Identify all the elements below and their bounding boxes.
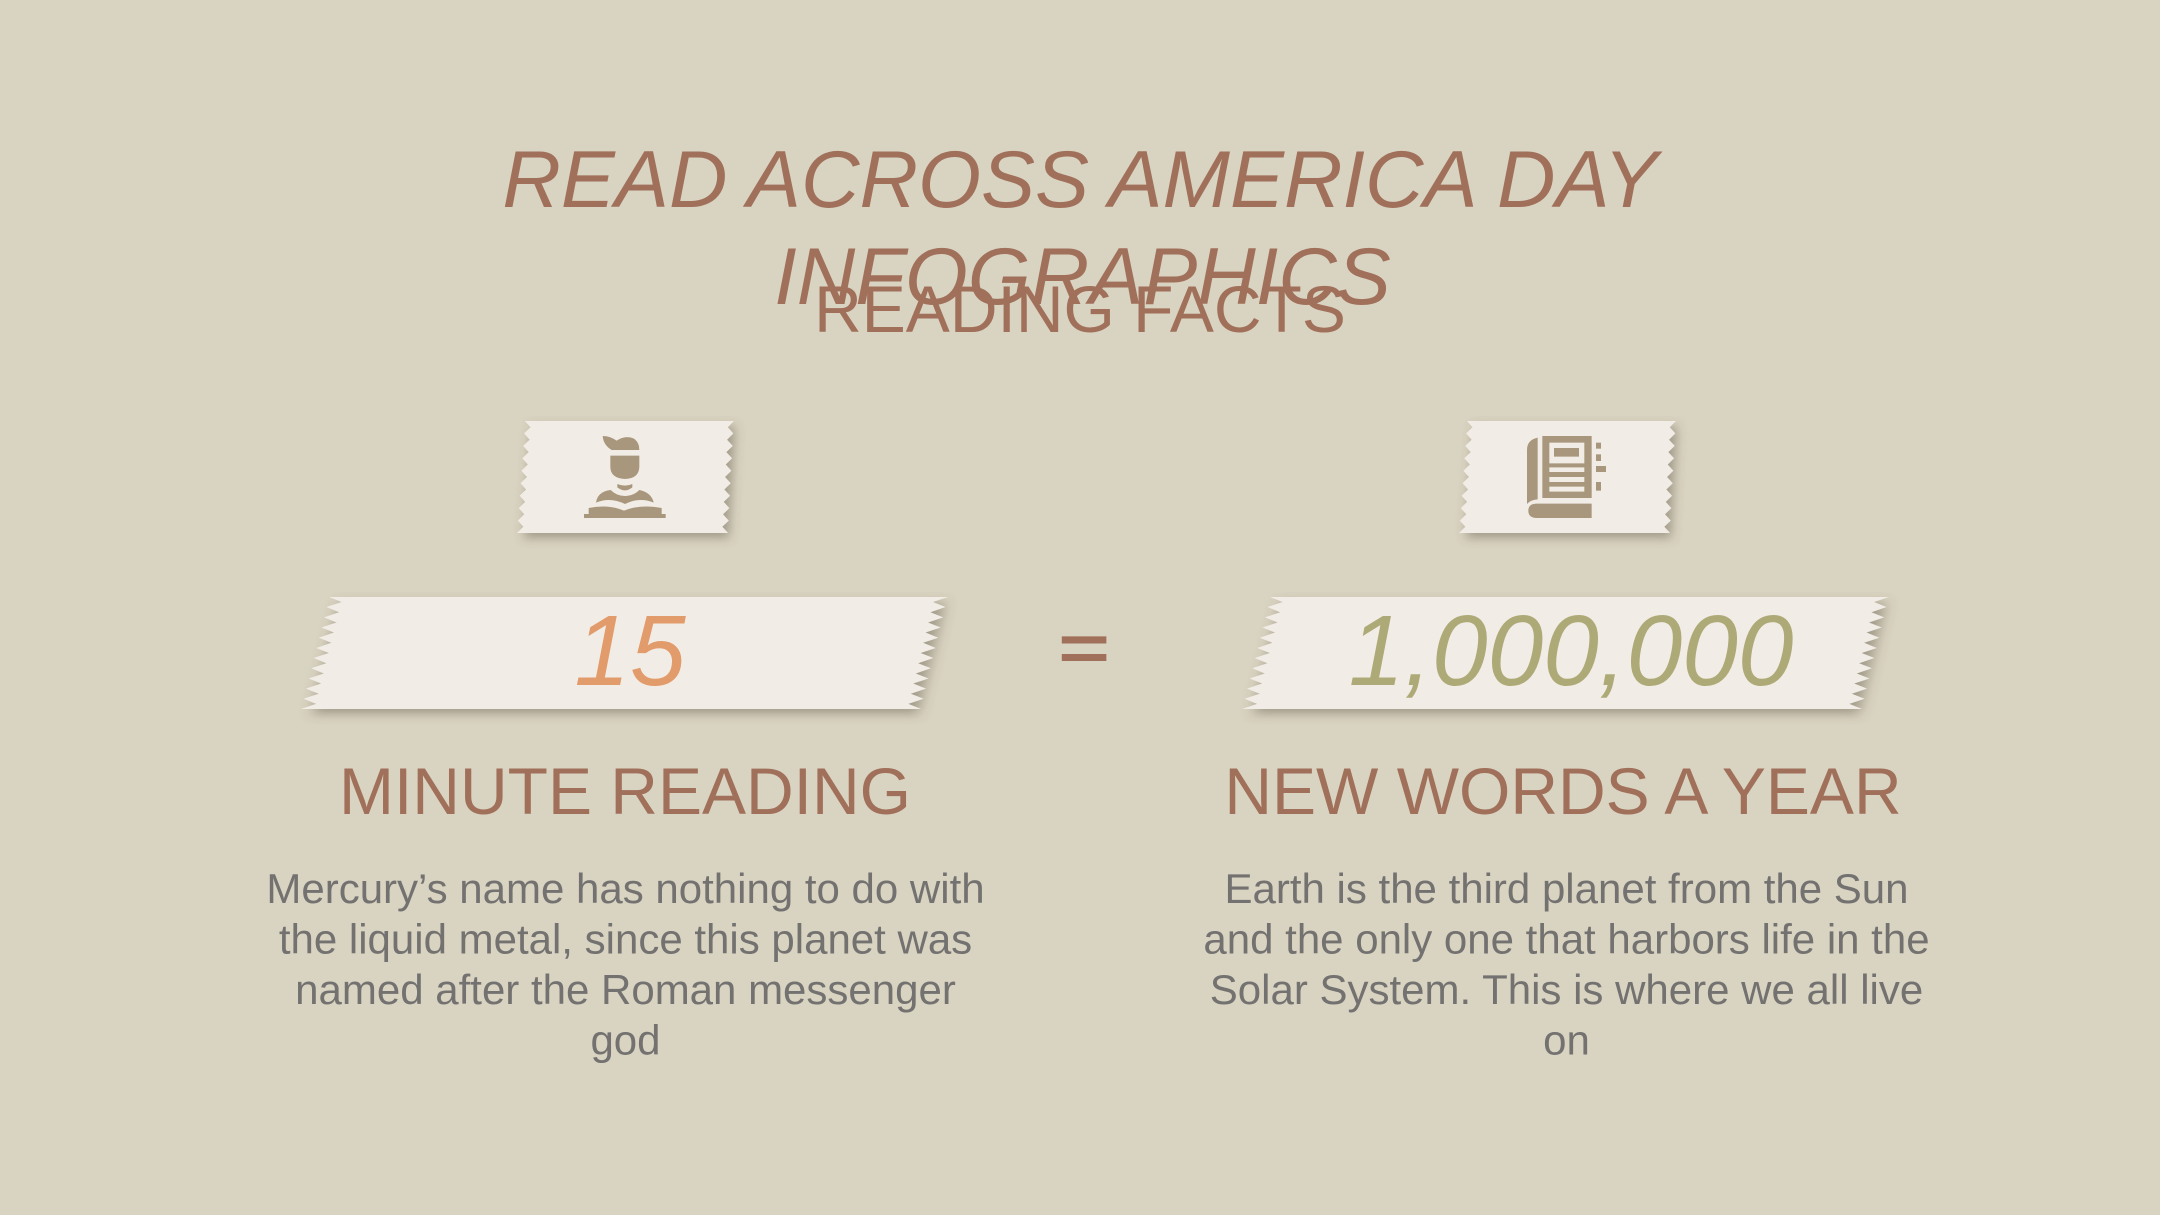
icon: book with text xyxy=(1527,436,1606,518)
description: Solar System. This is where we all live xyxy=(1210,966,1923,1013)
heading: MINUTE READING xyxy=(339,754,911,828)
subtitle: READING FACTS xyxy=(814,272,1346,346)
description: named after the Roman messenger xyxy=(295,966,956,1013)
description: Earth is the third planet from the Sun xyxy=(1224,865,1909,912)
number: 1,000,000 xyxy=(1349,595,1793,707)
panel: right column xyxy=(1203,421,1930,1064)
description: the liquid metal, since this planet was xyxy=(279,916,972,962)
icon tape: book xyxy=(1459,421,1676,533)
description xyxy=(1203,865,1930,1064)
panel: left column xyxy=(266,421,985,1064)
icon tape: reader xyxy=(517,421,734,533)
description: god xyxy=(590,1016,661,1064)
number tape: 1,000,000 xyxy=(1242,595,1889,709)
heading: NEW WORDS A YEAR xyxy=(1224,754,1902,828)
icon: person reading a book xyxy=(584,436,666,518)
description: on xyxy=(1543,1016,1590,1064)
number tape: 15 xyxy=(301,595,948,709)
title: INFOGRAPHICS xyxy=(774,232,1391,322)
description xyxy=(266,865,985,1064)
title xyxy=(502,135,1663,322)
number: 15 xyxy=(574,595,686,707)
description: Mercury’s name has nothing to do with xyxy=(266,865,985,912)
title: READ ACROSS AMERICA DAY xyxy=(502,135,1663,225)
equals sign: = xyxy=(1058,611,1110,684)
description: and the only one that harbors life in the xyxy=(1203,916,1930,962)
